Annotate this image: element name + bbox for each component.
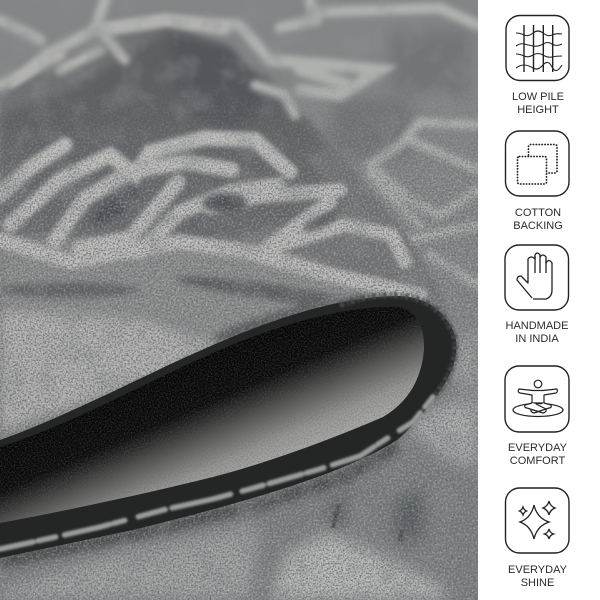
- label: everyday comfort: EVERYDAY: [508, 442, 568, 454]
- feature: everyday shine: [506, 488, 569, 589]
- large-scale mottling across the rug: [0, 0, 478, 600]
- feature: handmade in india: [505, 245, 568, 345]
- label: low pile height: HEIGHT: [517, 104, 559, 116]
- panel: feature icons column: [478, 0, 600, 600]
- icon: open hand: [505, 245, 568, 310]
- icon: overlapping cotton swatches: [506, 131, 569, 196]
- label: cotton backing: BACKING: [513, 220, 563, 232]
- label: everyday shine: EVERYDAY: [508, 564, 568, 576]
- looped pile texture: [0, 88, 478, 600]
- feature: everyday comfort: [505, 366, 569, 467]
- feature: cotton backing: [506, 131, 569, 232]
- icon: meditating figure: [505, 366, 569, 432]
- light pile fringe along front edge: [0, 397, 433, 549]
- rug roll, front pile with pattern: [0, 13, 458, 434]
- outer pile of the rug edge: [340, 295, 455, 398]
- icon: pile weave: [506, 16, 569, 80]
- dark rug edge wrapping the roll: [0, 296, 456, 558]
- feature: low pile height: [506, 16, 569, 116]
- icon: sparkles: [506, 488, 569, 553]
- label: handmade in india: HANDMADE: [506, 320, 568, 332]
- label: everyday shine: SHINE: [521, 577, 554, 589]
- backing weave texture: [0, 300, 430, 530]
- photo: rolled grey rug: [0, 0, 478, 600]
- label: cotton backing: COTTON: [515, 207, 561, 219]
- label: handmade in india: IN INDIA: [515, 333, 559, 345]
- cotton backing inside the roll: [0, 307, 424, 523]
- lower rug surface: [0, 330, 478, 600]
- label: low pile height: LOW PILE: [512, 91, 564, 103]
- label: everyday comfort: COMFORT: [510, 455, 565, 467]
- background rug, out of focus: [0, 0, 478, 440]
